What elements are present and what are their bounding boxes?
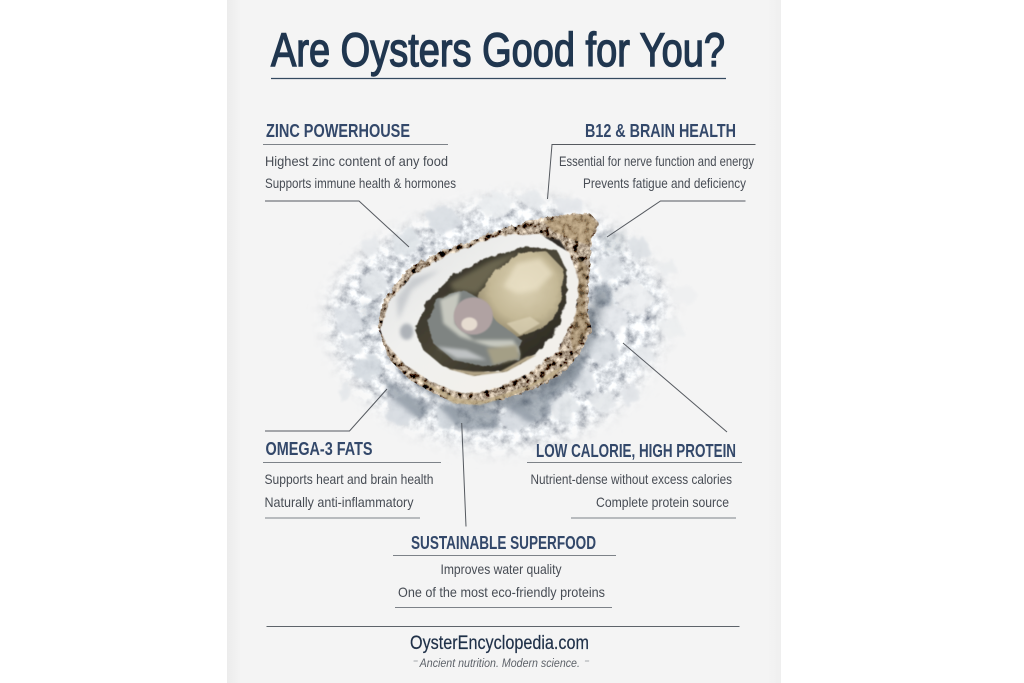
oyster body	[477, 252, 563, 338]
callout: omega-3 fats: Supports heart and brain health	[264, 471, 434, 487]
callout: zinc powerhouse: Supports immune health & hormones	[265, 175, 456, 191]
callout: sustainable superfood	[393, 423, 616, 608]
callout: omega-3 fats: OMEGA-3 FATS	[266, 439, 372, 459]
callout: B12 and brain health: Prevents fatigue and deficiency	[583, 175, 746, 191]
callout: sustainable superfood: SUSTAINABLE SUPERFOOD	[411, 533, 596, 553]
callout: zinc powerhouse: ZINC POWERHOUSE	[266, 121, 410, 141]
callout: low calorie, high protein	[527, 343, 742, 518]
callout: zinc powerhouse: Highest zinc content of any food	[265, 153, 448, 169]
footer: OysterEncyclopedia.com	[410, 633, 589, 654]
illustration: oyster	[378, 213, 603, 410]
footer: ⁻ Ancient nutrition. Modern science. ⁻	[412, 656, 590, 670]
callout: sustainable superfood: Improves water quality	[440, 561, 562, 577]
illustration: crushed ice	[330, 190, 700, 447]
callout: omega-3 fats	[263, 389, 441, 518]
title: Are Oysters Good for You?	[271, 23, 725, 76]
callout: B12 and brain health: B12 & BRAIN HEALTH	[585, 121, 736, 141]
callout: low calorie, high protein: LOW CALORIE, HIGH PROTEIN	[536, 441, 736, 461]
oyster nacre ring	[380, 234, 579, 394]
oyster grey mantle	[427, 290, 522, 367]
callout: low calorie, high protein: Complete protein source	[596, 494, 729, 510]
callout: omega-3 fats: Naturally anti-inflammatory	[264, 494, 414, 510]
oyster lower lip	[415, 363, 567, 405]
callout: zinc powerhouse	[263, 121, 456, 247]
oyster outer shell	[378, 213, 599, 403]
callout: B12 and brain health	[548, 121, 756, 237]
footer	[266, 626, 740, 670]
callout: low calorie, high protein: Nutrient-dense without excess calories	[530, 471, 732, 487]
oyster contact shadow	[390, 290, 603, 410]
panel: poster background	[227, 0, 781, 683]
callout: B12 and brain health: Essential for nerve function and energy	[559, 153, 754, 169]
oyster cavity	[415, 247, 567, 375]
oyster adductor muscle	[454, 297, 493, 335]
callout: sustainable superfood: One of the most eco-friendly proteins	[398, 584, 605, 600]
